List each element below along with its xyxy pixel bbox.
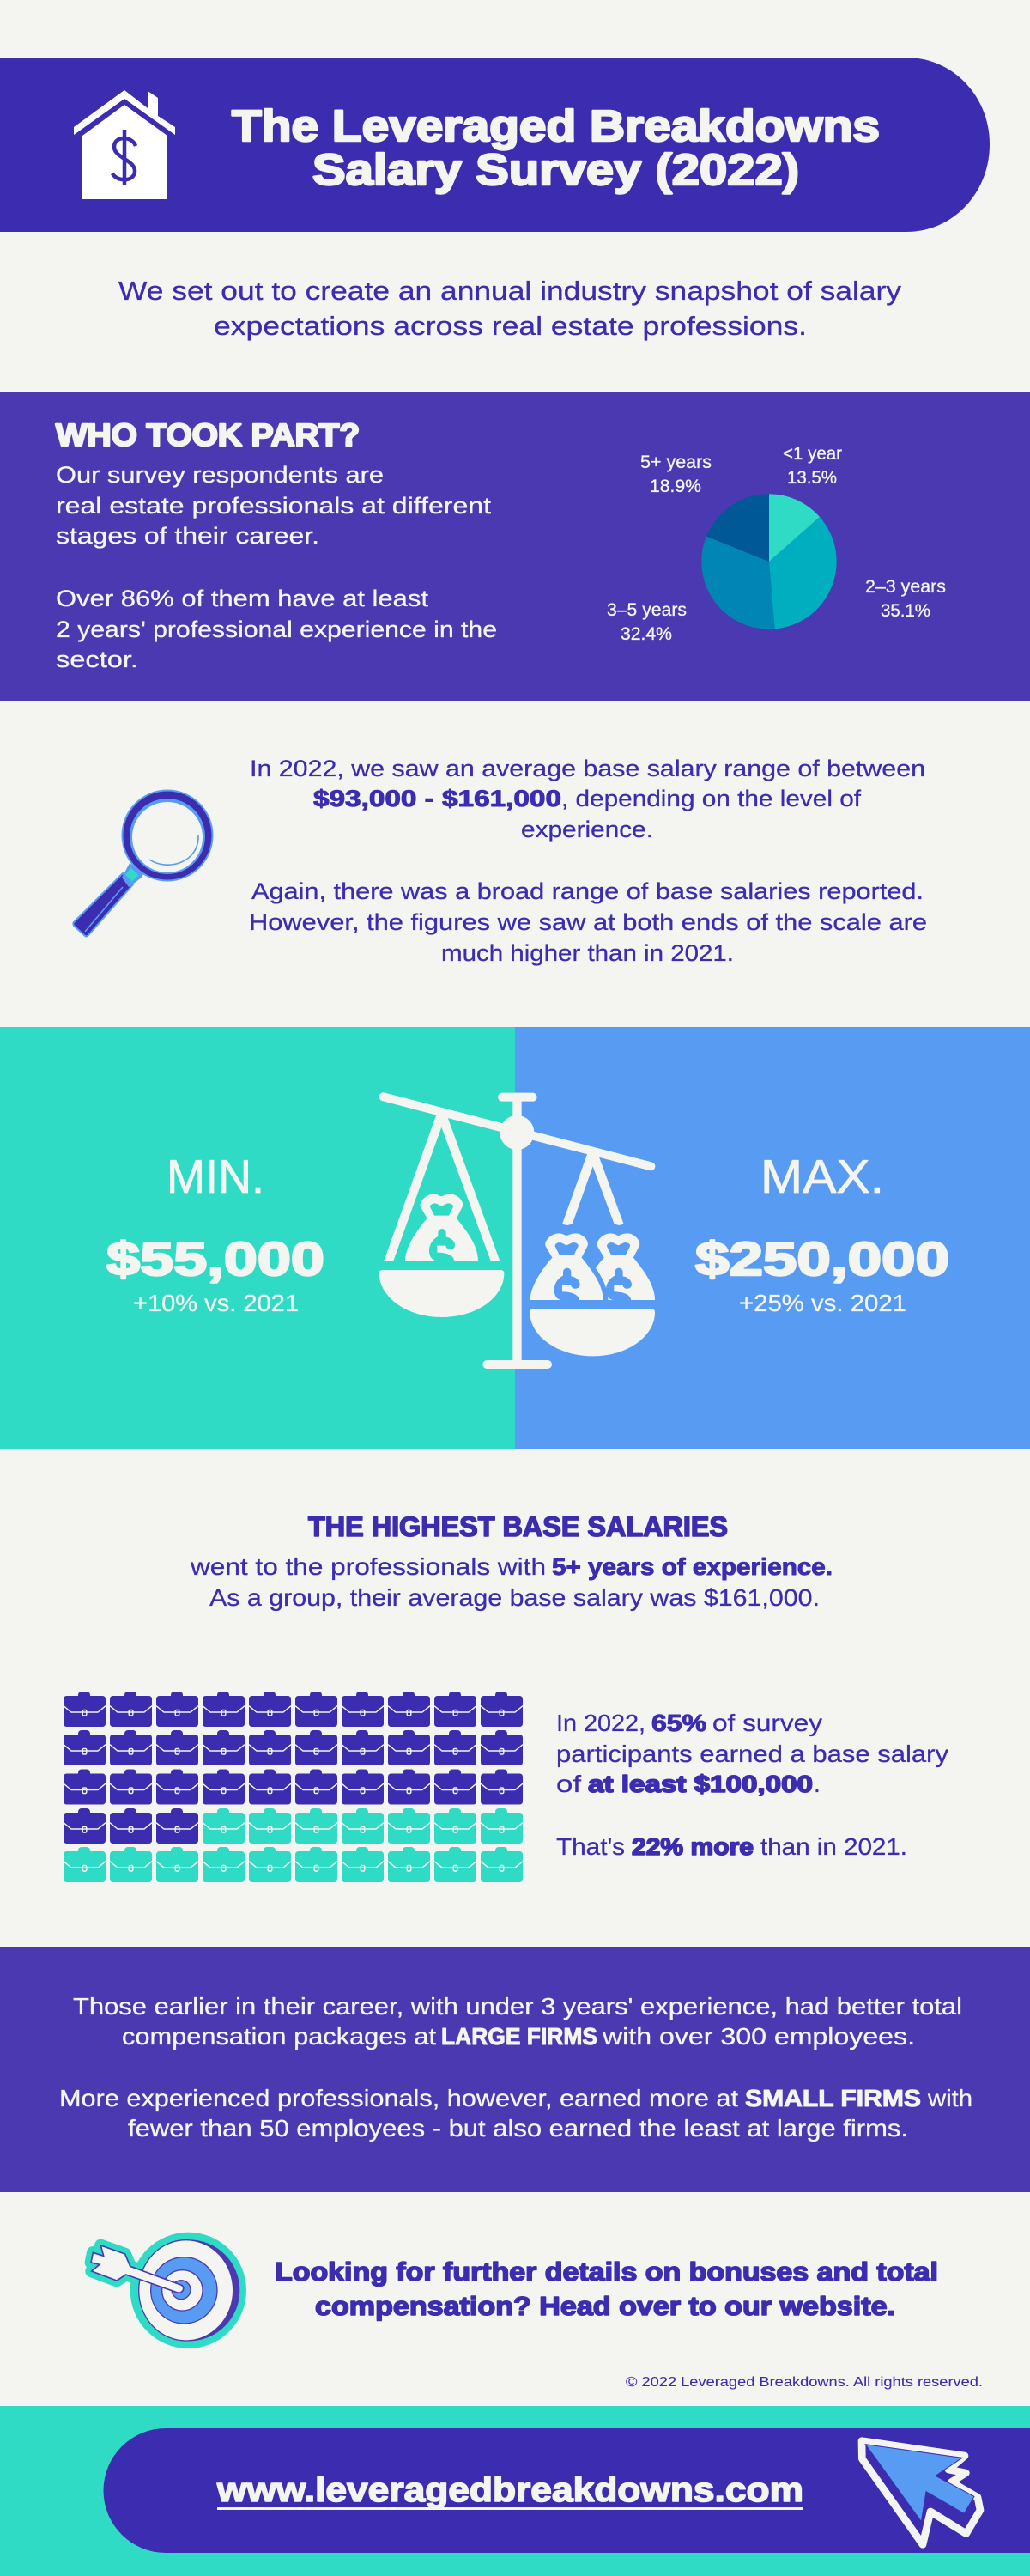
min figures	[106, 1150, 324, 1316]
text block: respondents: Our survey respondents are	[56, 462, 384, 488]
text block: highest base salaries	[190, 1511, 833, 1611]
text block: 65% earned at least $100,000: than in 2021.	[760, 1833, 907, 1860]
pie labels: 18.9%	[650, 477, 701, 496]
panel: firm size comparison: More experienced professionals, however, earned more at	[59, 2085, 738, 2111]
text block: average salary range: experience.	[521, 817, 653, 842]
panel: firm size comparison: Those earlier in their career, with under 3 years' experience, had better total	[73, 1993, 962, 2020]
icon: target with dart	[91, 2233, 246, 2348]
text block: respondents: real estate professionals at different	[56, 493, 492, 519]
text block: 65% earned at least $100,000: In 2022,	[556, 1710, 645, 1736]
panel: firm size comparison: fewer than 50 employees - but also earned the least at large firms.	[128, 2115, 908, 2142]
header banner	[0, 58, 990, 232]
panel: firm size comparison: with	[927, 2085, 972, 2111]
text block: average salary range: much higher than in 2021.	[441, 940, 734, 966]
max figures: +25% vs. 2021	[739, 1290, 906, 1316]
min figures: MIN.	[167, 1150, 264, 1203]
panel: firm size comparison: with over 300 employees.	[602, 2023, 915, 2050]
pictogram: 65% of participants, briefcases	[64, 1692, 523, 1882]
pie labels: 32.4%	[621, 624, 672, 644]
icon: balance scale with money bags	[379, 1097, 655, 1364]
text block: average salary range	[249, 756, 927, 966]
title: Salary Survey (2022)	[312, 145, 799, 194]
text block: 65% earned at least $100,000: of survey	[712, 1710, 822, 1736]
text block: respondents: Over 86% of them have at least	[56, 586, 429, 611]
pie labels: 13.5%	[787, 468, 837, 488]
min figures: +10% vs. 2021	[133, 1290, 299, 1316]
panel: firm size comparison: compensation packages at	[122, 2023, 436, 2050]
intro text: We set out to create an annual industry snapshot of salary	[118, 276, 902, 306]
panel: firm size comparison: LARGE FIRMS	[441, 2023, 597, 2050]
text block: 65% earned at least $100,000	[556, 1710, 948, 1860]
text block: 65% earned at least $100,000: participants earned a base salary	[556, 1741, 948, 1767]
pie labels: 35.1%	[881, 601, 930, 621]
text block: average salary range: However, the figures we saw at both ends of the scale are	[249, 909, 927, 935]
pie chart: experience	[701, 494, 837, 629]
text block: respondents: sector.	[56, 647, 138, 672]
footer pill	[103, 2428, 1030, 2553]
text block: highest base salaries: went to the professionals with	[190, 1553, 546, 1580]
pie labels: 3–5 years	[607, 600, 687, 620]
call to action: compensation? Head over to our website.	[315, 2291, 895, 2321]
title	[232, 101, 880, 194]
max figures: $250,000	[695, 1232, 949, 1285]
pie labels: <1 year	[783, 444, 842, 464]
panel: min and max salaries	[0, 1027, 1030, 1449]
intro text	[118, 276, 902, 341]
intro text: expectations across real estate professions.	[214, 311, 807, 341]
panel: firm size comparison	[0, 1947, 1030, 2192]
panel: footer	[0, 2406, 1030, 2576]
panel: who took part	[0, 392, 1030, 701]
text block: respondents: stages of their career.	[56, 523, 319, 549]
min figures: $55,000	[106, 1232, 324, 1285]
copyright: © 2022 Leveraged Breakdowns. All rights reserved.	[626, 2375, 983, 2390]
text block: 65% earned at least $100,000: 65%	[651, 1710, 706, 1736]
website link: www.leveragedbreakdowns.com	[216, 2471, 803, 2509]
pie labels	[607, 444, 946, 644]
max figures: MAX.	[760, 1150, 884, 1203]
title: The Leveraged Breakdowns	[232, 101, 880, 150]
pie labels: 2–3 years	[865, 577, 946, 597]
call to action: Looking for further details on bonuses and total	[275, 2257, 938, 2287]
text block: 65% earned at least $100,000: at least $100,000	[588, 1771, 813, 1797]
panel: firm size comparison: SMALL FIRMS	[745, 2085, 921, 2111]
text block: 65% earned at least $100,000: That's	[556, 1833, 625, 1860]
text block: average salary range: Again, there was a broad range of base salaries reported.	[251, 878, 924, 904]
icon: cursor arrow	[862, 2441, 980, 2544]
call to action	[275, 2257, 938, 2321]
heading: highest base salaries: THE HIGHEST BASE SALARIES	[308, 1511, 728, 1542]
text block: 65% earned at least $100,000: 22% more	[632, 1833, 754, 1860]
text block: respondents	[56, 462, 497, 672]
text block: average salary range: , depending on the level of	[561, 786, 862, 811]
icon: house with dollar sign	[74, 90, 175, 199]
text block: respondents: 2 years' professional experience in the	[56, 617, 497, 642]
icon: magnifying glass	[73, 790, 213, 936]
heading: who took part: WHO TOOK PART?	[56, 417, 360, 453]
text block: 65% earned at least $100,000: of	[556, 1771, 581, 1797]
pie labels: 5+ years	[640, 453, 712, 472]
text block: highest base salaries: As a group, their average base salary was $161,000.	[209, 1584, 820, 1611]
text block: average salary range: $93,000 - $161,000	[313, 786, 561, 811]
text block: highest base salaries: 5+ years of experience.	[552, 1553, 833, 1580]
text block: 65% earned at least $100,000: .	[814, 1771, 821, 1797]
max figures	[695, 1150, 949, 1316]
text block: average salary range: In 2022, we saw an average base salary range of between	[250, 756, 925, 781]
